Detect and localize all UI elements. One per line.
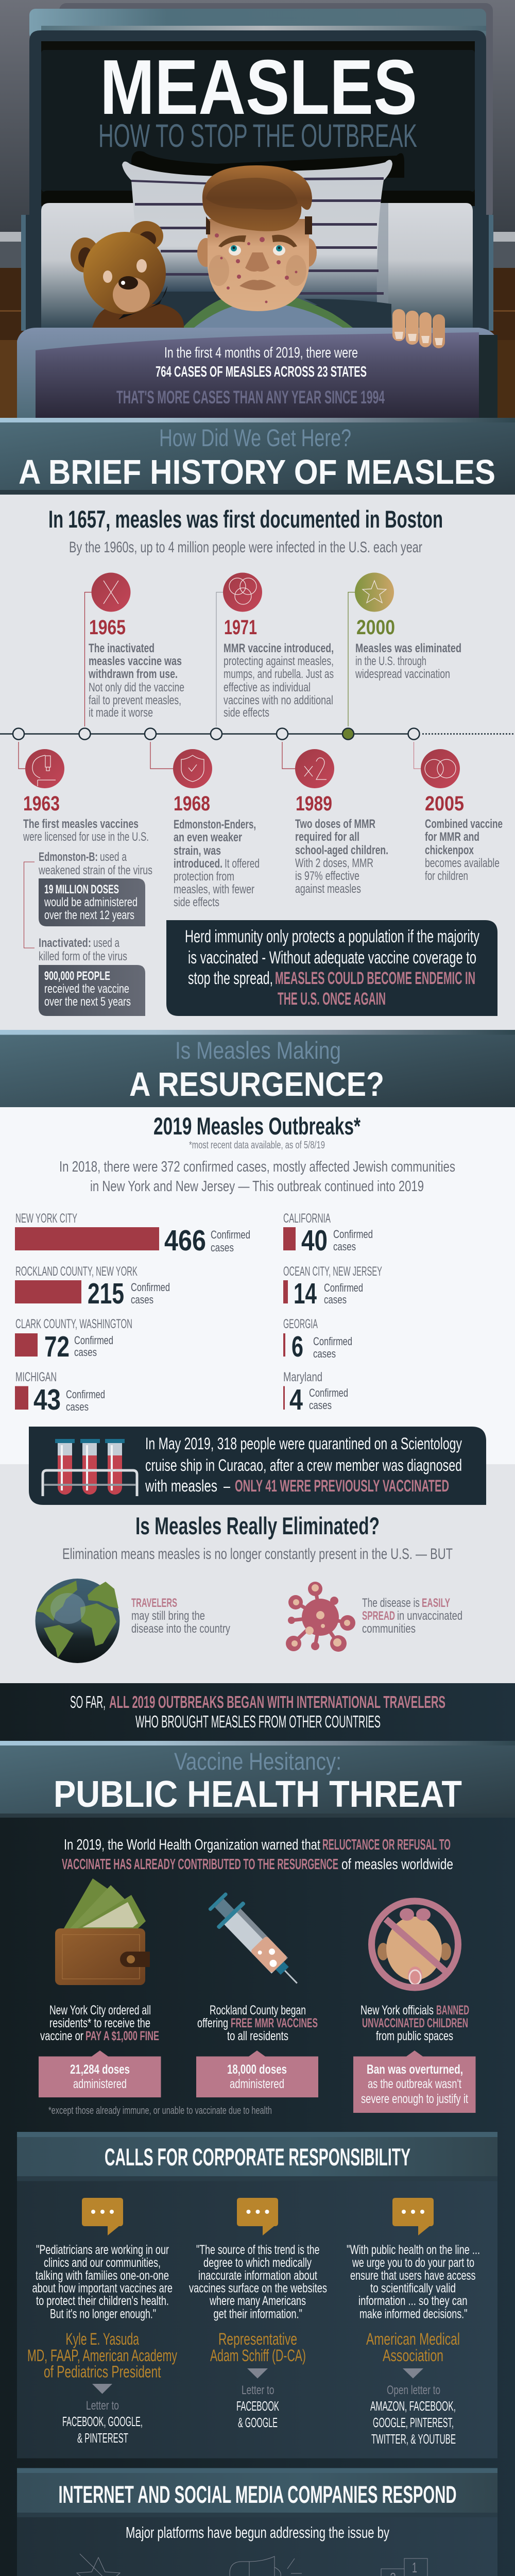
milestone 1968: It offered xyxy=(225,857,260,871)
bar: Ocean City: cases xyxy=(324,1293,347,1306)
milestone 1971 xyxy=(223,573,334,720)
easily spread text: in unvaccinated xyxy=(397,1609,462,1623)
milestone 1968: Edmonston-Enders, xyxy=(174,818,256,832)
section header: brief history: How Did We Get Here? xyxy=(159,424,351,451)
vaccine type bracket xyxy=(24,862,35,948)
icon: podium: 1 xyxy=(412,2560,417,2575)
stat box: 19 million doses: 19 MILLION DOSES xyxy=(44,883,119,896)
icon: megaphone xyxy=(230,2556,302,2576)
milestone 1963: killed form of the virus xyxy=(39,950,127,963)
easily spread text: communities xyxy=(362,1622,416,1636)
icon: wallet with cash xyxy=(55,1878,150,1985)
action text: New York officials xyxy=(360,2003,469,2043)
bar: Rockland County: 215 xyxy=(88,1277,124,1310)
bar: Clark County: cases xyxy=(74,1346,97,1359)
result box: ban overturned: severe enough to justify it xyxy=(361,2092,468,2106)
milestone 2000 xyxy=(355,573,461,681)
quote column: American Medical Association: TWITTER, & YOUTUBE xyxy=(371,2431,456,2447)
blanket xyxy=(17,328,497,418)
milestone 1963: used a xyxy=(100,850,127,864)
WHO statement: of measles worldwide xyxy=(341,1856,453,1873)
milestone 1965: The inactivated xyxy=(89,641,154,655)
bar: Michigan: 43 xyxy=(33,1383,61,1416)
milestone 1963: Inactivated: xyxy=(39,936,91,950)
bar: Clark County: Confirmed xyxy=(74,1334,113,1347)
bar: Rockland County: cases xyxy=(131,1293,153,1306)
intro text on blanket: In the first 4 months of 2019, there were xyxy=(164,345,358,361)
callout: herd immunity: stop the spread, xyxy=(188,969,273,988)
callout: herd immunity: THE U.S. ONCE AGAIN xyxy=(278,989,386,1009)
quote column: Adam Schiff: & GOOGLE xyxy=(238,2415,278,2430)
milestone 1965: measles vaccine was xyxy=(89,654,182,668)
result box: 18,000 doses: 18,000 doses xyxy=(227,2062,287,2077)
milestone 1963: were licensed for use in the U.S. xyxy=(23,830,149,844)
action text: Rockland County: Rockland County began xyxy=(210,2003,306,2018)
title: MEASLES: MEASLES xyxy=(100,43,417,130)
bar: Ocean City xyxy=(283,1264,382,1310)
quote column: Adam Schiff: FACEBOOK xyxy=(236,2398,279,2414)
bar: Maryland xyxy=(283,1370,348,1416)
boy ears xyxy=(197,238,215,267)
hero illustration: sick boy in bed xyxy=(0,0,515,418)
quote column: American Medical Association: Open letter to xyxy=(387,2383,440,2397)
icon: virus xyxy=(286,1582,355,1652)
milestone 2005: for children xyxy=(425,869,468,883)
bar: Clark County: CLARK COUNTY, WASHINGTON xyxy=(15,1317,132,1331)
easily spread text: The disease is xyxy=(362,1596,420,1610)
milestone 1963: Edmonston-B: xyxy=(39,850,98,864)
milestone 1963: weakened strain of the virus xyxy=(38,863,152,877)
bar: Ocean City: 14 xyxy=(294,1277,317,1310)
milestone 2005: for MMR and xyxy=(425,830,479,844)
bar: Maryland: 4 xyxy=(289,1383,303,1416)
quote column: Adam Schiff: Representative xyxy=(218,2330,297,2348)
quote column: American Medical Association: Association xyxy=(383,2346,443,2365)
icon: test tubes xyxy=(43,1439,137,1496)
section header: resurgence xyxy=(0,1030,515,1107)
travelers text: TRAVELERS xyxy=(131,1596,177,1610)
boy hand xyxy=(392,309,445,348)
panel: history timeline xyxy=(0,495,515,1030)
quote column: Kyle Yasuda: Kyle E. Yasuda xyxy=(66,2330,139,2348)
section header: brief history xyxy=(0,418,515,495)
stat box: 900,000 people: received the vaccine xyxy=(44,982,129,996)
stat box: 19 million doses: over the next 12 years xyxy=(44,908,134,922)
quote column: Adam Schiff: inaccurate information about xyxy=(198,2268,317,2283)
heading: 2019 Measles Outbreaks* xyxy=(153,1112,360,1140)
milestone 2000: 2000 xyxy=(356,616,395,639)
measles spots xyxy=(215,233,298,303)
WHO statement xyxy=(62,1837,453,1873)
data note: *most recent data available, as of 5/8/19 xyxy=(189,1140,325,1151)
result box: 21,284 doses: 21,284 doses xyxy=(70,2062,130,2077)
panel: internet and social media companies respond xyxy=(17,2468,497,2576)
boy face xyxy=(208,219,309,311)
intro: Major platforms have begun addressing the issue by xyxy=(126,2523,389,2541)
easily spread text: SPREAD xyxy=(362,1609,395,1623)
footnote: *except those already immune, or unable to vaccinate due to health xyxy=(48,2105,272,2116)
quote column: Kyle Yasuda: of Pediatrics President xyxy=(44,2363,161,2381)
boy eyebrows xyxy=(218,235,246,247)
result box: ban overturned: as the outbreak wasn't xyxy=(368,2077,461,2091)
bar: Rockland County xyxy=(15,1264,170,1310)
quote column: Kyle Yasuda: Letter to xyxy=(86,2399,119,2413)
milestone 1963: used a xyxy=(93,936,119,950)
callout: cruise ship quarantine: – xyxy=(224,1477,230,1495)
action text: New York officials: New York officials xyxy=(360,2003,434,2018)
teddy bear xyxy=(71,221,184,330)
action text: New York City: residents* to receive the xyxy=(49,2016,150,2030)
left pillow xyxy=(122,161,221,292)
bar: New York City: cases xyxy=(211,1241,234,1254)
section header: public health threat: Vaccine Hesitancy: xyxy=(174,1748,341,1775)
callout: cruise ship quarantine: with measles xyxy=(145,1477,217,1495)
intro text xyxy=(59,1159,455,1195)
section header: public health threat: PUBLIC HEALTH THREAT xyxy=(54,1774,462,1815)
action text: New York officials: BANNED xyxy=(436,2003,469,2018)
boy nose xyxy=(245,252,269,272)
milestone 1989: is 97% effective xyxy=(295,869,359,883)
milestone 1968: an even weaker xyxy=(174,831,242,844)
icon: crossed star xyxy=(77,2554,126,2576)
quote column: Adam Schiff: get their information." xyxy=(213,2307,302,2321)
milestone 1971: effective as individual xyxy=(224,681,311,694)
stat box: 19 million doses: would be administered xyxy=(44,895,138,909)
milestone 1968 xyxy=(173,749,260,909)
quote column: Adam Schiff: Adam Schiff (D-CA) xyxy=(210,2346,306,2365)
right pillow xyxy=(286,160,392,305)
quote column: Kyle Yasuda: MD, FAAP, American Academy xyxy=(27,2346,177,2365)
action text: New York City: PAY A $1,000 FINE xyxy=(85,2029,159,2043)
panel: is measles eliminated xyxy=(0,1427,515,1683)
icon: baby with prohibition sign xyxy=(372,1901,458,1988)
milestone 2005: 2005 xyxy=(425,792,464,815)
intro text on blanket xyxy=(116,345,385,408)
action text: Rockland County: offering xyxy=(197,2016,228,2030)
quote column: American Medical Association: make informed decisions." xyxy=(359,2307,468,2321)
panel: vaccine hesitancy xyxy=(0,1818,515,2576)
milestone 1965: 1965 xyxy=(89,616,126,639)
milestone 1989: against measles xyxy=(295,882,361,896)
milestone 1989: With 2 doses, MMR xyxy=(295,856,373,870)
action text: Rockland County xyxy=(197,2003,318,2043)
bar: Ocean City: OCEAN CITY, NEW JERSEY xyxy=(283,1264,382,1279)
arrow xyxy=(247,2368,268,2378)
bar: Michigan: MICHIGAN xyxy=(15,1370,57,1384)
boy eyes xyxy=(229,245,285,256)
quote column: American Medical Association: to scientifically valid xyxy=(370,2281,456,2296)
quote column: Kyle Yasuda xyxy=(27,2198,177,2446)
action text: Rockland County: to all residents xyxy=(227,2029,288,2043)
travelers text: may still bring the xyxy=(131,1609,205,1623)
stat box: 900,000 people: 900,000 PEOPLE xyxy=(44,969,110,983)
milestone 1968: protection from xyxy=(174,870,234,884)
result box: 21,284 doses: administered xyxy=(73,2077,127,2091)
quote column: American Medical Association: information ... so they can xyxy=(358,2294,468,2308)
bar: Maryland: cases xyxy=(309,1399,332,1412)
easily spread text: EASILY xyxy=(422,1596,450,1610)
bar: Georgia: cases xyxy=(313,1347,336,1360)
milestone 1971: vaccines with no additional xyxy=(224,693,333,707)
milestone 1989: 1989 xyxy=(296,792,332,815)
result box: 21,284 doses xyxy=(39,2050,161,2097)
heading: Is Measles Really Eliminated? xyxy=(135,1512,380,1539)
result box: 18,000 doses xyxy=(196,2050,318,2097)
icon: podium xyxy=(373,2558,456,2576)
bar: Michigan: cases xyxy=(66,1400,89,1413)
milestone 1989: school-aged children. xyxy=(295,843,388,857)
result box: ban overturned: Ban was overturned, xyxy=(367,2062,463,2077)
banner: international travelers: SO FAR, xyxy=(70,1692,106,1711)
milestone 1989: required for all xyxy=(295,830,359,844)
milestone 1989 xyxy=(295,749,388,896)
bar: California: Confirmed xyxy=(333,1228,373,1241)
bar: Michigan xyxy=(15,1370,105,1416)
icon: syringe xyxy=(203,1888,310,1996)
milestone 1971: side effects xyxy=(224,706,269,720)
milestone 1963 xyxy=(23,749,152,1016)
icon: speech bubble xyxy=(392,2198,434,2235)
quote column: Kyle Yasuda: & PINTEREST xyxy=(77,2430,128,2446)
quote column: Kyle Yasuda: to protect their children's health. xyxy=(36,2294,169,2308)
milestone 1971: 1971 xyxy=(224,616,257,639)
milestone 1971: mumps, and rubella. Just as xyxy=(224,667,334,681)
milestone 1968: 1968 xyxy=(174,792,210,815)
action text: New York officials: from public spaces xyxy=(376,2029,453,2043)
milestone 1963: The first measles vaccines xyxy=(23,817,139,831)
timeline line and nodes xyxy=(0,728,515,740)
panel: 2019 outbreaks xyxy=(0,1107,515,1464)
milestone 1965: withdrawn from use. xyxy=(88,667,178,681)
milestone 1963: 1963 xyxy=(23,792,60,815)
milestone 1968: strain, was xyxy=(174,844,221,858)
section header: public health threat xyxy=(0,1741,515,1818)
arrow xyxy=(403,2368,423,2378)
result box: 18,000 doses: administered xyxy=(230,2077,284,2091)
travelers text: disease into the country xyxy=(131,1622,230,1636)
bar: Maryland: Maryland xyxy=(283,1370,322,1384)
quote column: Kyle Yasuda: "Pediatricians are working in our xyxy=(36,2243,169,2257)
quote column: Adam Schiff xyxy=(189,2198,327,2430)
travelers text xyxy=(131,1596,230,1636)
quote column: Adam Schiff: "The source of this trend is the xyxy=(196,2243,319,2257)
quote column: Adam Schiff: where many Americans xyxy=(209,2294,306,2308)
bar: Michigan: Confirmed xyxy=(66,1388,105,1401)
quote column: Adam Schiff: degree to which medically xyxy=(203,2256,312,2270)
milestone 1968: introduced. xyxy=(174,857,222,871)
quote column: American Medical Association xyxy=(347,2198,480,2447)
boy body and shirt xyxy=(181,295,361,330)
result box: ban overturned xyxy=(353,2050,476,2113)
section header: resurgence: A RESURGENCE? xyxy=(129,1065,384,1103)
milestone 1968: measles, with fewer xyxy=(174,883,254,896)
quote column: American Medical Association: GOOGLE, PINTEREST, xyxy=(373,2415,454,2430)
bar: Ocean City: Confirmed xyxy=(324,1281,363,1294)
bar: Clark County xyxy=(15,1317,132,1363)
milestone 1965: it made it worse xyxy=(89,706,153,720)
action text: Rockland County: FREE MMR VACCINES xyxy=(231,2016,318,2030)
milestone 2000: widespread vaccination xyxy=(355,667,450,681)
bar: Rockland County: ROCKLAND COUNTY, NEW YORK xyxy=(15,1264,138,1279)
quote column: American Medical Association: AMAZON, FACEBOOK, xyxy=(370,2398,456,2414)
milestone 1968: side effects xyxy=(174,895,219,909)
icon: globe xyxy=(35,1579,119,1663)
icon: speech bubble xyxy=(237,2198,278,2235)
bar: Georgia: Confirmed xyxy=(313,1335,352,1348)
bar: Georgia: GEORGIA xyxy=(283,1317,318,1331)
quote column: Kyle Yasuda: about how important vaccines are xyxy=(32,2281,173,2296)
milestone 1971: MMR vaccine introduced, xyxy=(224,641,334,655)
quote column: Adam Schiff: vaccines surface on the websites xyxy=(189,2281,327,2296)
bar: New York City: 466 xyxy=(164,1224,206,1257)
action text: New York City xyxy=(40,2003,159,2043)
bar: New York City: NEW YORK CITY xyxy=(15,1211,77,1226)
bar: Rockland County: Confirmed xyxy=(131,1281,170,1294)
stat box: 900,000 people xyxy=(39,965,145,1016)
stat box: 900,000 people: over the next 5 years xyxy=(44,995,131,1009)
quote column: American Medical Association: American Medical xyxy=(366,2330,460,2348)
quote column: Kyle Yasuda: clinics and our communities, xyxy=(44,2256,161,2270)
panel: calls for corporate responsibility xyxy=(17,2132,497,2459)
callout: cruise ship quarantine xyxy=(29,1427,486,1505)
section header: resurgence: Is Measles Making xyxy=(175,1037,341,1064)
bar: New York City: Confirmed xyxy=(211,1228,250,1241)
bar: California: CALIFORNIA xyxy=(283,1211,331,1226)
milestone 1965: fail to prevent measles, xyxy=(89,693,181,707)
quote column: Adam Schiff: Letter to xyxy=(242,2383,274,2397)
boy hair xyxy=(206,216,312,234)
icon: speech bubble xyxy=(82,2198,123,2235)
arrow xyxy=(92,2384,112,2394)
bar: Maryland: Confirmed xyxy=(309,1386,348,1399)
connectors xyxy=(19,592,421,769)
milestone 1971: protecting against measles, xyxy=(224,654,334,668)
quote column: Kyle Yasuda: talking with families one-on-one xyxy=(36,2268,169,2283)
action text: New York City: New York City ordered all xyxy=(49,2003,151,2018)
easily spread text xyxy=(362,1596,462,1636)
boy mouth xyxy=(239,280,276,291)
milestone 2005 xyxy=(421,749,503,883)
banner: international travelers xyxy=(0,1683,515,1741)
quote column: Kyle Yasuda: FACEBOOK, GOOGLE, xyxy=(62,2414,143,2429)
bar: Georgia xyxy=(283,1317,352,1363)
quote column: Kyle Yasuda: But it's no longer enough." xyxy=(50,2307,156,2321)
milestone 2005: chickenpox xyxy=(425,843,474,857)
stat box: 19 million doses xyxy=(39,878,145,926)
milestone 1965 xyxy=(88,573,184,720)
milestone 1965: Not only did the vaccine xyxy=(89,681,184,694)
milestone 1989: Two doses of MMR xyxy=(295,817,375,831)
bar: California xyxy=(283,1211,373,1257)
milestone 2000: in the U.S. through xyxy=(355,654,426,668)
bar: Clark County: 72 xyxy=(44,1330,70,1363)
milestone 2000: Measles was eliminated xyxy=(355,641,461,655)
bar: Georgia: 6 xyxy=(291,1330,303,1363)
intro text on blanket: 764 CASES OF MEASLES ACROSS 23 STATES xyxy=(156,364,367,380)
bar chart: confirmed cases xyxy=(15,1211,382,1416)
bar: California: 40 xyxy=(301,1224,328,1257)
action text: New York City: vaccine or xyxy=(40,2029,83,2043)
callout: herd immunity xyxy=(166,920,497,1016)
WHO statement: In 2019, the World Health Organization warned that xyxy=(64,1837,320,1853)
bar: California: cases xyxy=(333,1240,356,1253)
bar: New York City xyxy=(15,1211,250,1257)
